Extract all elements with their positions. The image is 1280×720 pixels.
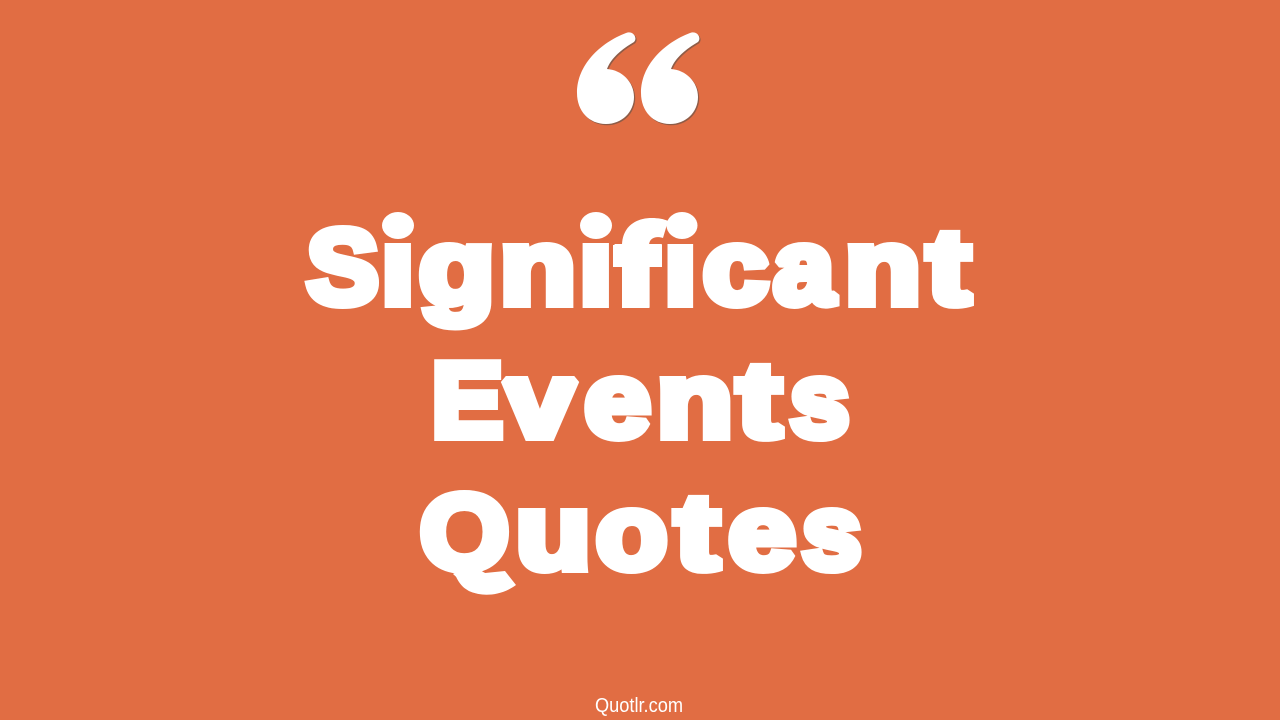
title line: Events: t [737, 342, 781, 460]
title [307, 208, 970, 595]
title line: Events: n [657, 342, 733, 460]
title line: Significant: t [927, 208, 970, 326]
title line: Significant: c [703, 208, 768, 326]
title line: Significant: i [381, 208, 414, 326]
title line: Significant: a [774, 208, 835, 326]
Q tail [453, 565, 516, 595]
footer: site name: Quotlr.com [595, 695, 683, 717]
title line: Quotes: u [516, 474, 591, 592]
title line: Significant: S [307, 208, 379, 326]
title line: Quotes: s [802, 474, 861, 592]
title line: Significant: g [419, 208, 495, 326]
title line: Events: v [505, 342, 575, 460]
icon: opening quotation mark [577, 32, 701, 125]
round i dots and f arch [382, 212, 698, 308]
title line: Events: E [432, 342, 503, 460]
title line: Quotes: o [596, 474, 667, 592]
title line: Significant: i [579, 208, 612, 326]
title line: Events: s [790, 342, 849, 460]
title line: Events: e [585, 342, 651, 460]
title line: Quotes: e [729, 474, 796, 592]
title line: Significant: f [618, 208, 657, 326]
title line: Significant: n [500, 208, 576, 326]
title line: Quotes: t [675, 474, 719, 592]
title line: Significant: n [845, 208, 921, 326]
title line: Significant: i [664, 208, 696, 326]
title line: Quotes: Q [420, 474, 509, 592]
